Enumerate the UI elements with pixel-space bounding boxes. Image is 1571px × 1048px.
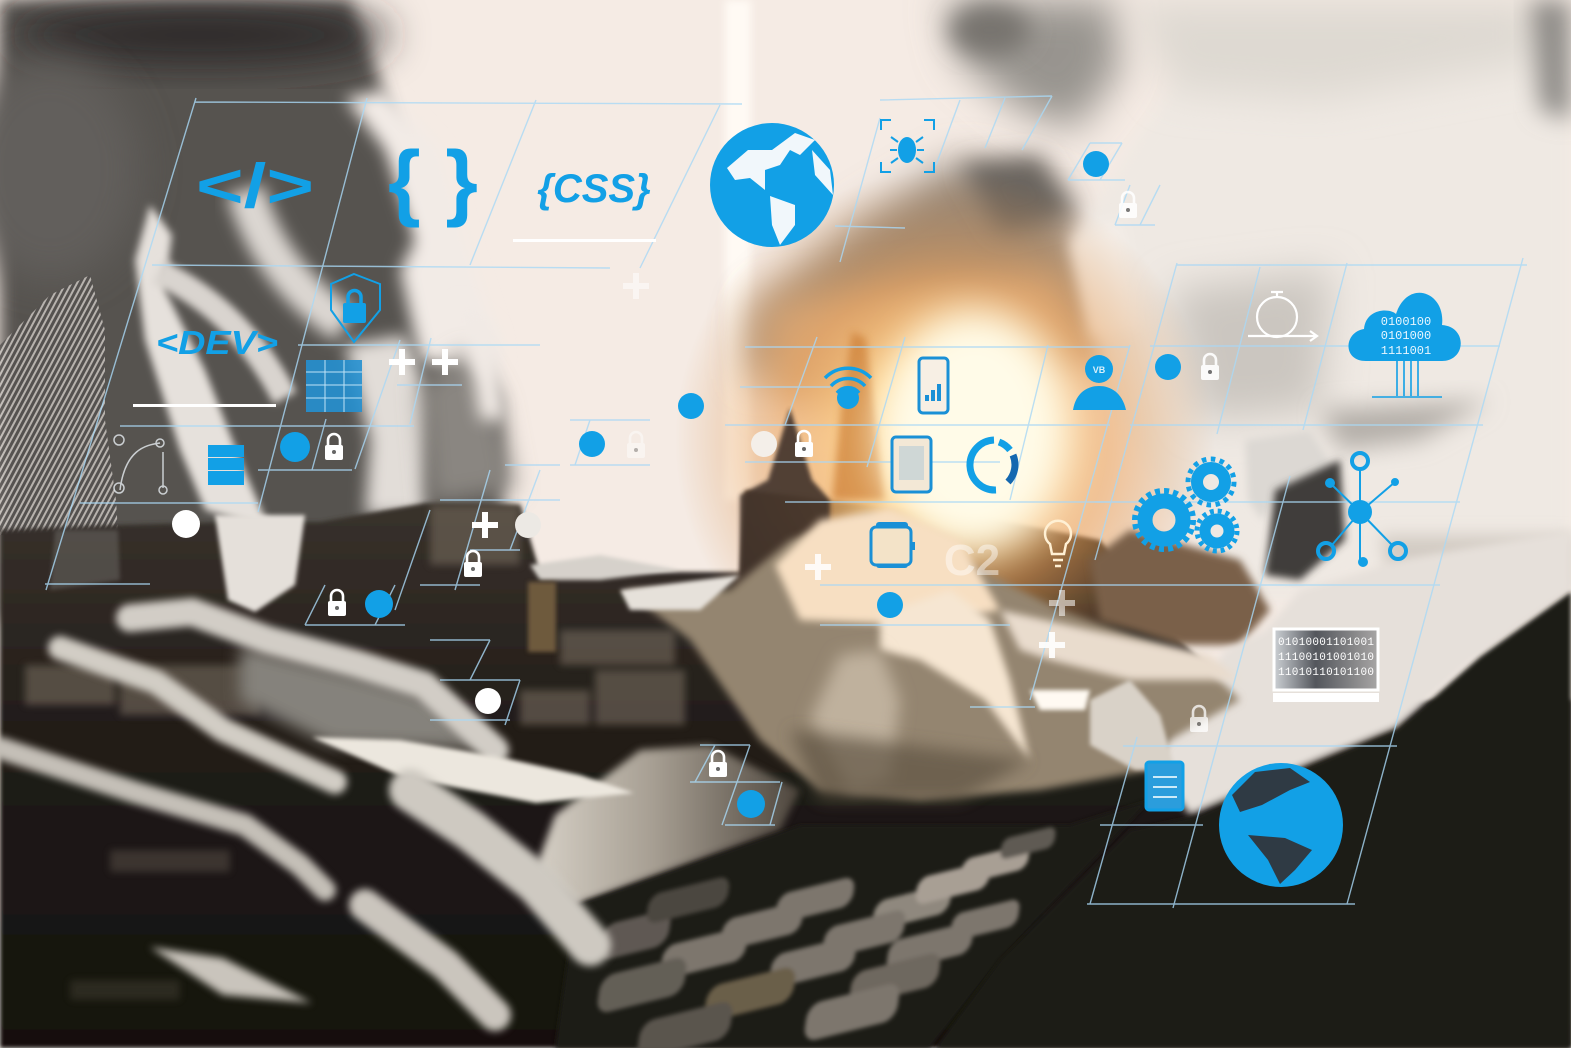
palm left of keyboard xyxy=(535,745,800,905)
icon: donut chart xyxy=(970,440,1015,490)
icon: vector curve xyxy=(114,435,167,494)
code label: CSS: {CSS} xyxy=(537,167,651,211)
icon: laptop with binary: 11100101001010 xyxy=(1278,652,1374,664)
left person shirt xyxy=(135,90,515,530)
icon: bug in scan frame xyxy=(881,120,934,172)
left typing hand fingers xyxy=(0,612,634,1015)
lock by thumb xyxy=(1190,706,1208,732)
lock xyxy=(464,551,482,577)
grid: upper center panel xyxy=(835,96,1160,262)
background: dark upper left wall xyxy=(0,0,505,620)
blue dots center xyxy=(579,393,704,458)
dot and lock top right xyxy=(1083,151,1137,218)
text: C2 faint: C2 xyxy=(944,536,1000,585)
blue dot on hand xyxy=(877,592,903,618)
icon: laptop with binary xyxy=(1273,629,1379,702)
icon: light bulb xyxy=(1045,521,1071,566)
plus signs near firewall xyxy=(389,349,458,375)
white dot left xyxy=(172,510,200,538)
city blocks xyxy=(25,505,685,1000)
grid: lower right panel xyxy=(1087,737,1397,904)
orange-lit city right of glow xyxy=(1090,530,1270,645)
center person head xyxy=(945,0,1120,130)
code label: CSS xyxy=(513,167,656,242)
icon: VR user: VB xyxy=(1093,365,1106,375)
icon: firewall xyxy=(306,360,362,412)
icon: stopwatch xyxy=(1248,292,1317,341)
right person sleeve over dark city xyxy=(1150,530,1571,815)
icon: binary cloud xyxy=(1348,293,1461,397)
icon: smartwatch xyxy=(871,522,915,568)
right lower dark city xyxy=(935,592,1571,1048)
keyboard body xyxy=(555,800,1150,1048)
right person hand holding phone xyxy=(1245,430,1345,580)
icon: network nodes xyxy=(1318,453,1406,566)
icon: smartphone chart xyxy=(919,358,948,413)
icon: binary cloud: 0101000 xyxy=(1381,329,1431,343)
moire strip over dark xyxy=(50,530,120,590)
lock and dot lower left xyxy=(328,590,393,618)
code icon: html tag: </> xyxy=(196,152,314,221)
grid: right panel xyxy=(1060,258,1527,908)
right person white shirt xyxy=(1075,30,1571,600)
dot and lock right xyxy=(1155,354,1219,380)
background: moire shirt sleeve at far left xyxy=(0,275,118,535)
icon: tablet xyxy=(892,437,931,492)
white dot lower xyxy=(475,688,501,714)
icon: VR user xyxy=(1073,355,1126,410)
center window pillar xyxy=(725,0,751,500)
lock and blue dot bottom xyxy=(709,751,765,818)
icon: binary cloud: 0100100 xyxy=(1381,315,1431,329)
label: DEV xyxy=(133,324,278,407)
icon: globe upper xyxy=(710,123,834,247)
orange building xyxy=(528,582,556,652)
icon: binary cloud: 1111001 xyxy=(1381,344,1431,358)
sunset glow xyxy=(675,170,1215,710)
white dot and lock center xyxy=(751,431,813,457)
plus and white dot xyxy=(472,512,541,538)
plus faint top xyxy=(623,273,649,299)
city horizon band on right xyxy=(1380,535,1571,650)
grid: center panel xyxy=(725,337,1130,707)
shirt tail xyxy=(215,515,305,612)
dot and lock left xyxy=(280,432,343,462)
overlay grids: thin blue perspective lines xyxy=(45,96,1527,908)
icon: wifi xyxy=(825,368,871,409)
calculator keys xyxy=(596,826,1057,1048)
icon: clipboard xyxy=(1146,762,1183,810)
plus signs center xyxy=(805,554,1075,658)
icon: server stack xyxy=(208,445,244,485)
center person shirt xyxy=(750,160,1110,380)
label: DEV: <DEV> xyxy=(156,324,278,361)
lower dark city xyxy=(0,490,1571,1048)
grid: small cells xyxy=(305,465,782,825)
dark skyscrapers xyxy=(740,332,885,590)
icon: shield lock xyxy=(331,274,380,342)
icon: globe lower xyxy=(1219,763,1343,887)
grid: upper left panel xyxy=(45,98,742,590)
glow core xyxy=(880,310,1070,550)
icon: laptop with binary: 01010001101001 xyxy=(1278,637,1374,649)
icon: gears xyxy=(1135,459,1237,551)
grid: faint center left xyxy=(570,420,650,465)
icon: laptop with binary: 11010110101100 xyxy=(1278,667,1374,679)
center hand on calculator xyxy=(530,508,1240,800)
code icon: curly braces: { } xyxy=(388,134,478,228)
